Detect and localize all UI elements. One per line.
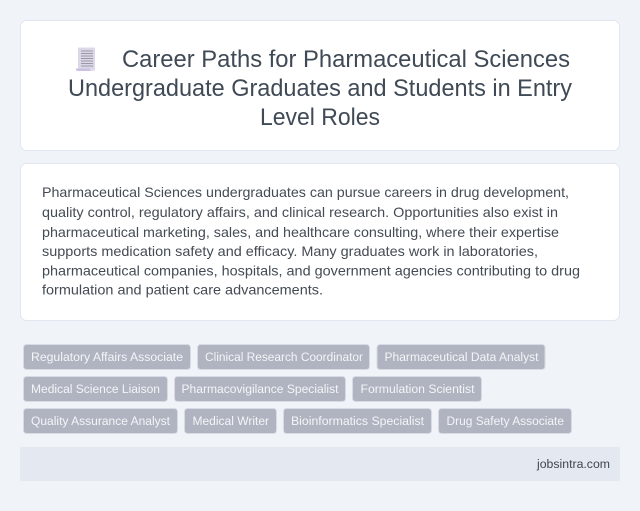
tag: Clinical Research Coordinator (205, 350, 363, 364)
tag: Medical Writer (192, 414, 269, 428)
title: Career Paths for Pharmaceutical Sciences (122, 46, 570, 73)
tag list (24, 344, 572, 434)
icon: document scroll (76, 48, 95, 71)
tag (377, 344, 545, 370)
text block: description: pharmaceutical marketing, sales, and healthcare consulting, where their expertise (42, 224, 559, 240)
text block: description: pharmaceutical companies, hospitals, and government agencies contributing to drug (42, 262, 580, 278)
tag: Bioinformatics Specialist (291, 414, 425, 428)
tag: Quality Assurance Analyst (31, 414, 171, 428)
title: Undergraduate Graduates and Students in Entry (68, 75, 572, 102)
tag (174, 376, 346, 402)
tag (184, 408, 276, 434)
tag (438, 408, 572, 434)
tag: Drug Safety Associate (446, 414, 564, 428)
title: Level Roles (260, 104, 380, 131)
tag (24, 344, 190, 370)
text block: description: quality control, regulatory affairs, and clinical research. Opportunities also exist in (42, 204, 558, 220)
tag (24, 376, 168, 402)
tag (352, 376, 482, 402)
tag (284, 408, 432, 434)
text block: description: supports medication safety and efficacy. Many graduates work in laboratories, (42, 243, 538, 259)
footer text: jobsintra.com (536, 457, 610, 471)
tag: Regulatory Affairs Associate (31, 350, 183, 364)
tag: Pharmacovigilance Specialist (182, 382, 339, 396)
tag: Pharmaceutical Data Analyst (384, 350, 539, 364)
text block: description (42, 184, 580, 298)
footer bar (20, 447, 620, 481)
text block: description: Pharmaceutical Sciences undergraduates can pursue careers in drug development, (42, 184, 569, 200)
panel: header card (20, 20, 620, 150)
tag (198, 344, 370, 370)
tag: Medical Science Liaison (31, 382, 160, 396)
title (68, 46, 572, 131)
tag: Formulation Scientist (360, 382, 475, 396)
tag (24, 408, 178, 434)
panel: description card (20, 164, 620, 320)
text block: description: formulation and patient care advancements. (42, 282, 323, 298)
